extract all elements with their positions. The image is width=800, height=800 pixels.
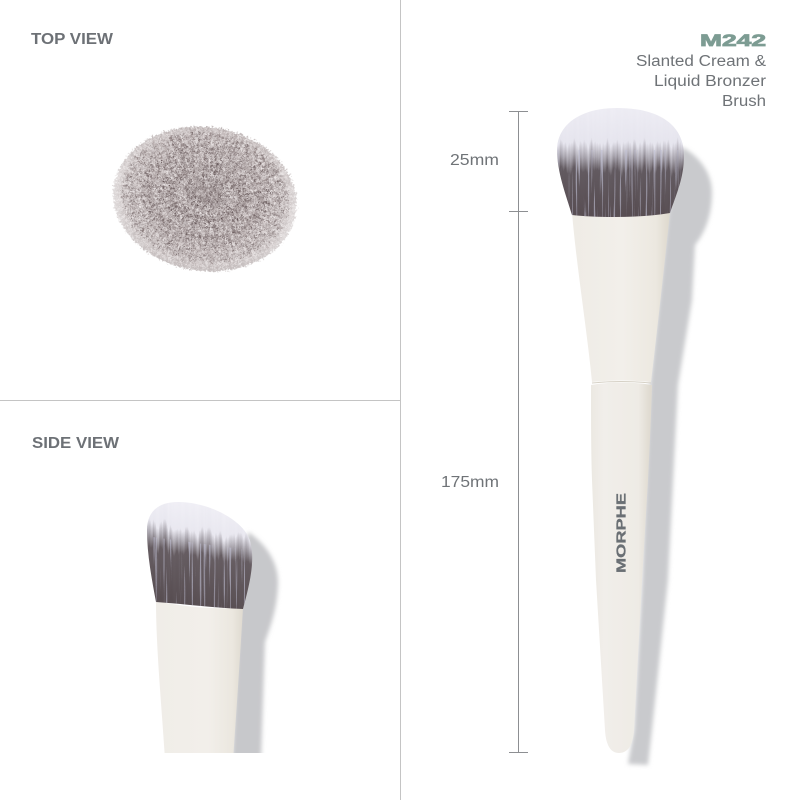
- dimension label: handle length: 175mm: [441, 474, 499, 491]
- brush handle: side: [156, 601, 243, 760]
- brush ferrule: upper: [572, 212, 670, 382]
- dimension label: bristle length: 25mm: [450, 152, 499, 169]
- panel: top view: [31, 31, 306, 283]
- bristles: side: [147, 502, 252, 609]
- product code: M242: [700, 32, 766, 50]
- icon: brush head from above: [112, 124, 299, 272]
- ferrule seam: [592, 382, 651, 383]
- drop shadow: side brush: [232, 532, 278, 760]
- panel: side view: [32, 435, 278, 760]
- panel: full brush with dimensions: [441, 32, 767, 765]
- handle brand text: MORPHE: [614, 493, 628, 573]
- dimension ruler: [509, 111, 528, 752]
- bristles: full brush: [557, 108, 684, 217]
- product name line 2: Liquid Bronzer: [654, 73, 766, 90]
- panel dividers: [0, 0, 400, 800]
- heading: top view: TOP VIEW: [31, 31, 113, 48]
- drop shadow: full brush: [628, 147, 712, 765]
- icon: brush side profile: [147, 502, 280, 753]
- heading: side view: SIDE VIEW: [32, 435, 119, 452]
- product title block: [636, 32, 767, 110]
- brush handle: lower: [591, 382, 652, 753]
- product name line 3: Brush: [722, 93, 766, 110]
- product name line 1: Slanted Cream &: [636, 53, 767, 70]
